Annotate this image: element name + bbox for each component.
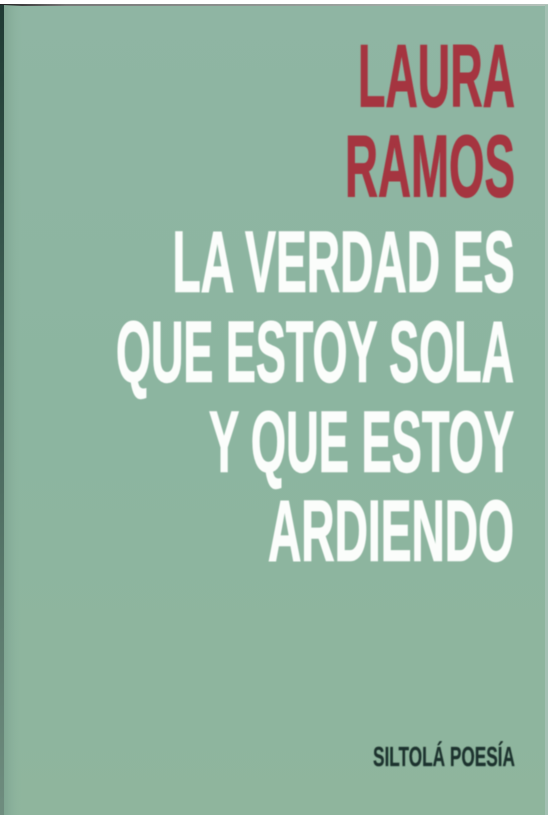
book title: [116, 214, 514, 580]
author name: [345, 26, 515, 216]
